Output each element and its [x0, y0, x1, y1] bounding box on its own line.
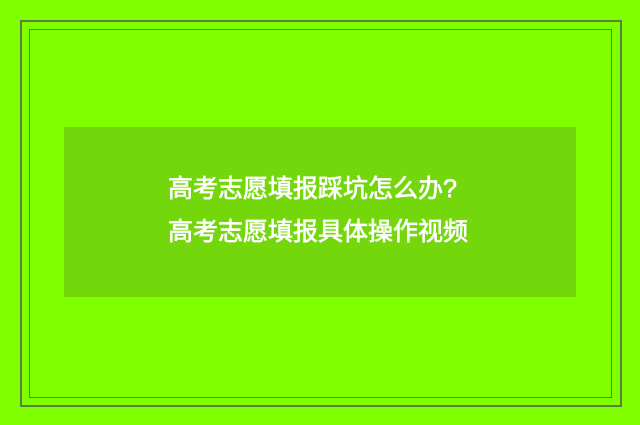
title: 高考志愿填报具体操作视频 — [168, 218, 468, 246]
title — [168, 175, 468, 246]
inner border frame — [29, 29, 612, 398]
panel: title background — [64, 127, 576, 297]
title: 高考志愿填报踩坑怎么办? — [168, 175, 457, 203]
